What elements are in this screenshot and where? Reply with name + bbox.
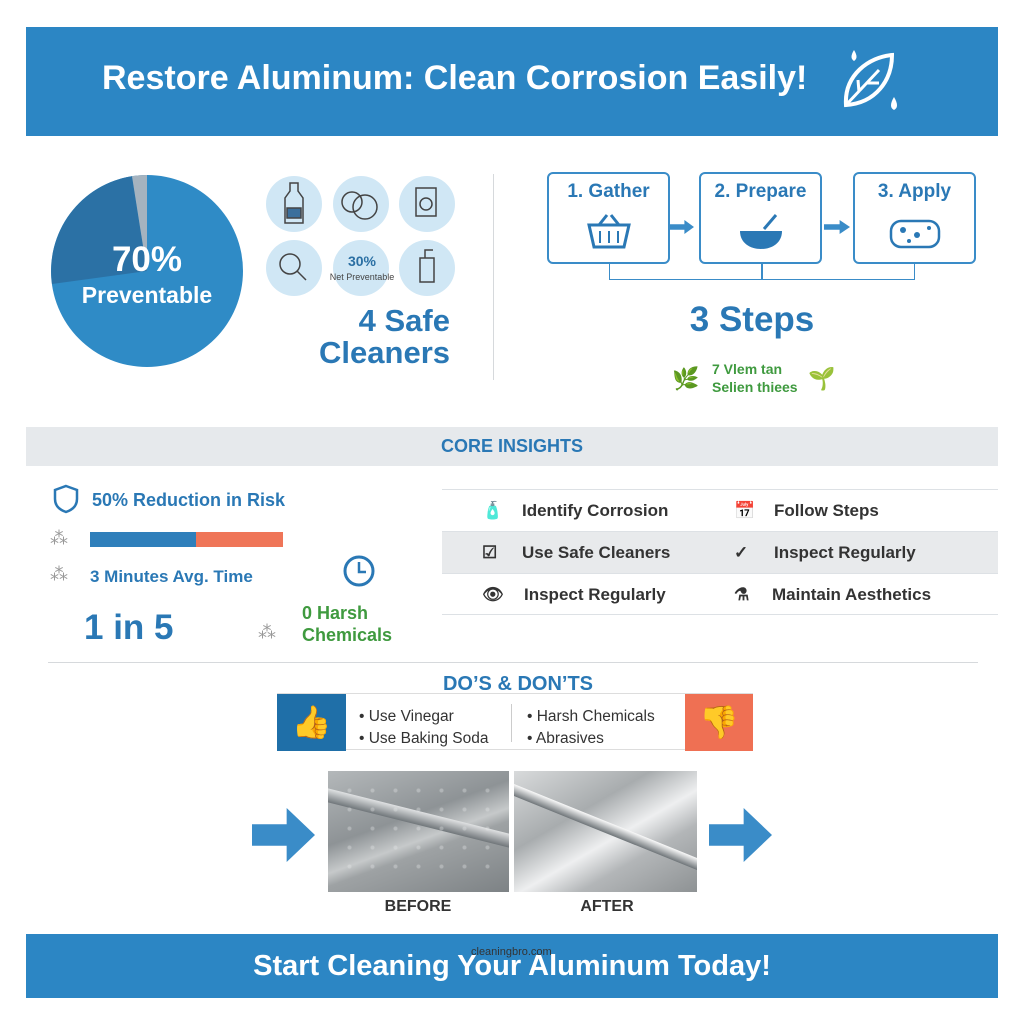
- footer bar: [26, 934, 998, 998]
- green tagline with leaves: [672, 361, 835, 395]
- core insights header: [26, 427, 998, 466]
- pie chart: Preventable: [82, 282, 212, 308]
- icon: thumbs down: [685, 694, 753, 751]
- step 3: [853, 172, 976, 264]
- step 2: [699, 172, 822, 264]
- panel: steps: [609, 264, 915, 280]
- panel: insights table: ☑: [482, 543, 497, 562]
- icon: leaf and drops: [844, 50, 897, 110]
- panel: insights table: Identify Corrosion: [522, 501, 668, 520]
- panel: left stats: ⁂: [50, 528, 68, 548]
- icon: shield: [54, 484, 78, 514]
- icons: safe cleaners grid: [266, 176, 455, 296]
- text: 3 steps: 3 Steps: [690, 300, 814, 339]
- step 1: 1. Gather: [567, 181, 650, 202]
- panel: insights table: 🧴: [482, 501, 503, 520]
- panel: left stats: 1 in 5: [84, 608, 173, 647]
- icon: thumbs up: [277, 694, 346, 751]
- panel: insights table: ✓: [734, 543, 748, 562]
- heading: do's and don'ts: DO’S & DON’TS: [443, 673, 593, 695]
- text: 4 safe cleaners: [319, 303, 450, 370]
- header bar: [26, 27, 998, 136]
- footer bar: cleaningbro.com: [471, 946, 552, 958]
- panel: left stats: [50, 484, 392, 647]
- photo: after: [514, 771, 697, 892]
- icon: thumbs down: 👎: [699, 704, 739, 740]
- panel: insights table: [442, 489, 998, 615]
- icon: thumbs up: 👍: [292, 704, 331, 740]
- green tagline with leaves: 🌱: [808, 366, 835, 391]
- panel: insights table: ⚗: [734, 585, 749, 604]
- green tagline with leaves: 🌿: [672, 366, 699, 391]
- panel: left stats: ⁂: [258, 622, 276, 642]
- labels: BEFORE: [385, 898, 451, 915]
- panel: dos and donts: • Use Vinegar: [359, 708, 454, 725]
- panel: left stats: ⁂: [50, 564, 68, 584]
- panel: insights table: Inspect Regularly: [524, 585, 666, 604]
- icon: clock: [344, 556, 374, 586]
- step 2: 2. Prepare: [715, 181, 806, 202]
- panel: insights table: 📅: [734, 501, 755, 520]
- arrow: [670, 220, 694, 234]
- pie chart: [51, 175, 243, 367]
- green tagline with leaves: 7 Vlem tan: [712, 361, 782, 377]
- panel: dos and donts: • Harsh Chemicals: [527, 708, 655, 725]
- text: 4 safe cleaners: 4 Safe: [359, 303, 450, 338]
- panel: dos and donts: • Abrasives: [527, 730, 604, 747]
- step 3: 3. Apply: [878, 181, 951, 202]
- connector line: [609, 264, 915, 280]
- arrow left: [252, 808, 315, 862]
- panel: insights table: 👁: [482, 585, 504, 604]
- arrow right: [709, 808, 772, 862]
- panel: dos and donts: • Use Baking Soda: [359, 730, 489, 747]
- footer bar: Start Cleaning Your Aluminum Today!: [253, 950, 771, 982]
- pie chart: 70%: [112, 240, 182, 279]
- core insights header: CORE INSIGHTS: [441, 436, 583, 456]
- panel: left stats: 3 Minutes Avg. Time: [90, 567, 253, 586]
- progress bar: [90, 532, 196, 547]
- callout: 30% not preventable: 30%: [348, 253, 376, 269]
- step 1: [547, 172, 670, 264]
- panel: insights table: Use Safe Cleaners: [522, 543, 670, 562]
- text: AFTER: [580, 898, 634, 915]
- panel: insights table: Maintain Aesthetics: [772, 585, 931, 604]
- panel: insights table: Inspect Regularly: [774, 543, 916, 562]
- photo: before: [328, 771, 509, 892]
- panel: left stats: Chemicals: [302, 625, 392, 645]
- text: 4 safe cleaners: Cleaners: [319, 335, 450, 370]
- panel: insights table: Follow Steps: [774, 501, 879, 520]
- title: Restore Aluminum: Clean Corrosion Easily!: [102, 59, 807, 97]
- icons: safe cleaners grid: Net Preventable: [330, 272, 394, 282]
- panel: left stats: 0 Harsh: [302, 603, 368, 623]
- green tagline with leaves: Selien thiees: [712, 379, 798, 395]
- panel: dos and donts: [277, 693, 753, 750]
- panel: left stats: 50% Reduction in Risk: [92, 490, 285, 510]
- arrow: [824, 220, 850, 234]
